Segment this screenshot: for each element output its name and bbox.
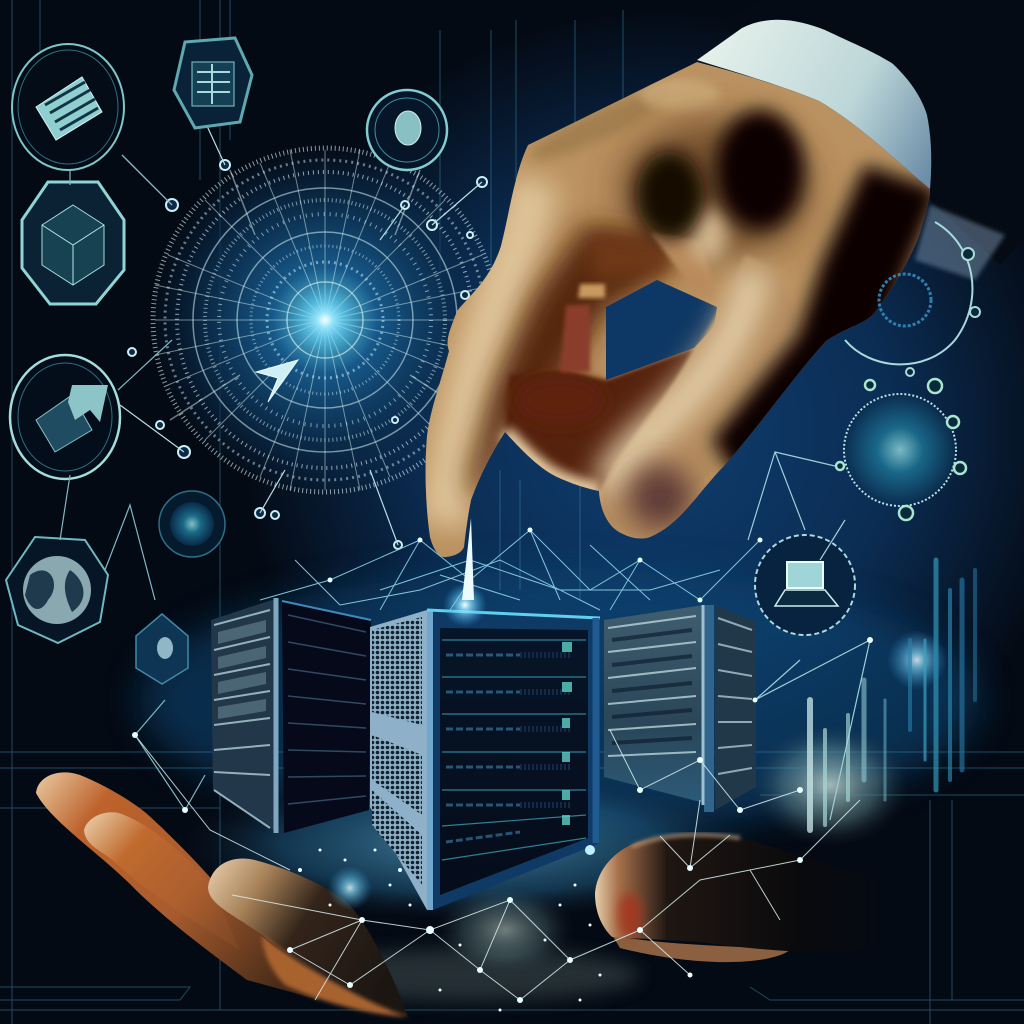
middle finger [84, 812, 240, 950]
shirt cuff [697, 20, 931, 189]
network web above servers [260, 530, 760, 610]
icon: shield badge [367, 90, 447, 170]
glowing floor network [132, 528, 873, 1012]
icon: small orb [159, 491, 225, 557]
icon: right upper ring [845, 222, 980, 376]
hand silhouette [426, 62, 930, 557]
knuckle shadow halo [620, 120, 810, 260]
rack rows [442, 640, 586, 860]
left connector lines [60, 155, 205, 810]
icon: hexagon cube [22, 182, 124, 304]
knuckle shadows [636, 151, 704, 239]
icon: document badge [174, 38, 252, 128]
icon: chart arrow badge [10, 355, 120, 479]
back finger [36, 772, 320, 1000]
dark sleeve [720, 0, 1024, 265]
icon: keyboard badge [12, 44, 124, 170]
vent panels [372, 617, 422, 885]
shadow right of index finger [468, 225, 670, 505]
server: left rack [211, 598, 371, 833]
top highlight [632, 835, 740, 847]
palm lower edge [262, 935, 408, 1017]
server: right rack [604, 605, 756, 812]
touch spark [443, 518, 487, 627]
hand shading [445, 79, 940, 538]
lower left hand [36, 772, 408, 1017]
server: centre rack [370, 610, 600, 910]
light bars chart [810, 560, 975, 830]
lower finger [612, 935, 790, 962]
dark side of hand [712, 165, 940, 490]
right connectors [748, 452, 870, 820]
data sphere [120, 100, 500, 549]
icon: small pin hexagon [136, 614, 188, 684]
icon: blue orb badge [836, 379, 966, 520]
thumb [599, 255, 758, 538]
gap between fingers [606, 280, 717, 380]
hand above: pointing hand [426, 0, 1024, 557]
lower right hand [595, 834, 885, 962]
red knuckle segment [560, 305, 590, 372]
icon: globe badge [6, 537, 108, 643]
palm finger [208, 858, 408, 1017]
icon: laptop badge [755, 535, 855, 635]
sphere nodes [128, 160, 487, 549]
light crease [650, 232, 722, 308]
curled finger [505, 348, 694, 491]
arrow pointer [256, 360, 298, 402]
